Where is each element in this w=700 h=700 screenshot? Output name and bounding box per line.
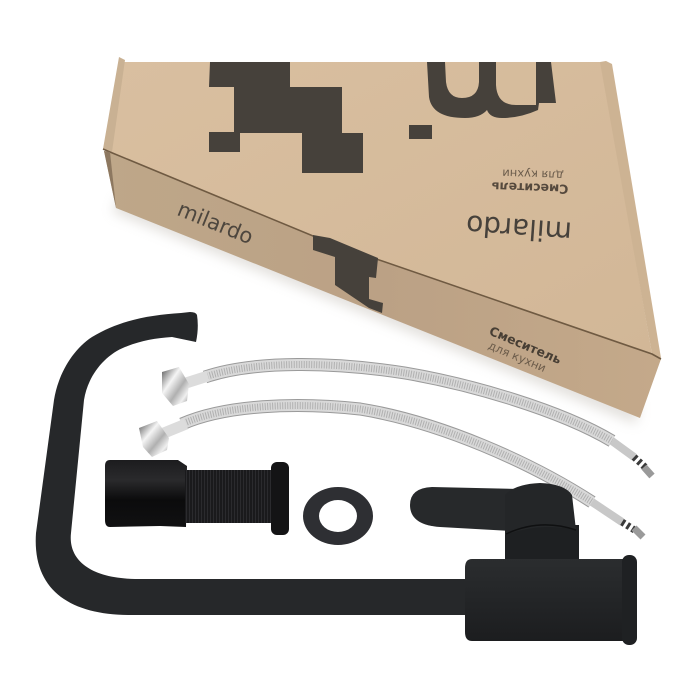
lower hose tip <box>592 502 622 522</box>
upper braided hose <box>162 364 652 476</box>
cylinder flange <box>622 555 637 645</box>
side product name: Смеситель <box>487 323 564 367</box>
vertical stem <box>505 525 579 565</box>
left flap <box>103 57 125 152</box>
large letter m <box>427 62 556 118</box>
logo dot <box>409 125 432 139</box>
side product subtitle: для кухни <box>486 338 548 375</box>
box side face <box>104 151 661 418</box>
top product subtitle: для кухни <box>502 166 564 183</box>
side pixel logo <box>313 235 383 313</box>
main cylinder <box>465 559 624 641</box>
box top face <box>110 62 652 354</box>
threaded mount <box>105 460 289 535</box>
lever handle <box>410 487 520 531</box>
side milardo text: milardo <box>174 197 257 249</box>
faucet body <box>410 483 637 645</box>
mount flange <box>271 462 289 535</box>
lower braided hose <box>139 406 643 537</box>
lower hose nut <box>139 421 186 457</box>
upper hose nut <box>162 367 208 406</box>
curved spout <box>36 312 470 615</box>
cardboard box <box>103 57 661 418</box>
mount threads <box>185 470 271 523</box>
handle collar <box>505 483 576 535</box>
box shadow <box>112 195 640 424</box>
mount nut <box>105 460 187 527</box>
top milardo text: milardo <box>465 208 573 249</box>
upper hose tip <box>612 441 634 457</box>
right flap <box>600 61 661 358</box>
top pixel logo <box>209 62 363 173</box>
rubber washer <box>303 487 373 545</box>
top product name: Смеситель <box>491 179 569 197</box>
